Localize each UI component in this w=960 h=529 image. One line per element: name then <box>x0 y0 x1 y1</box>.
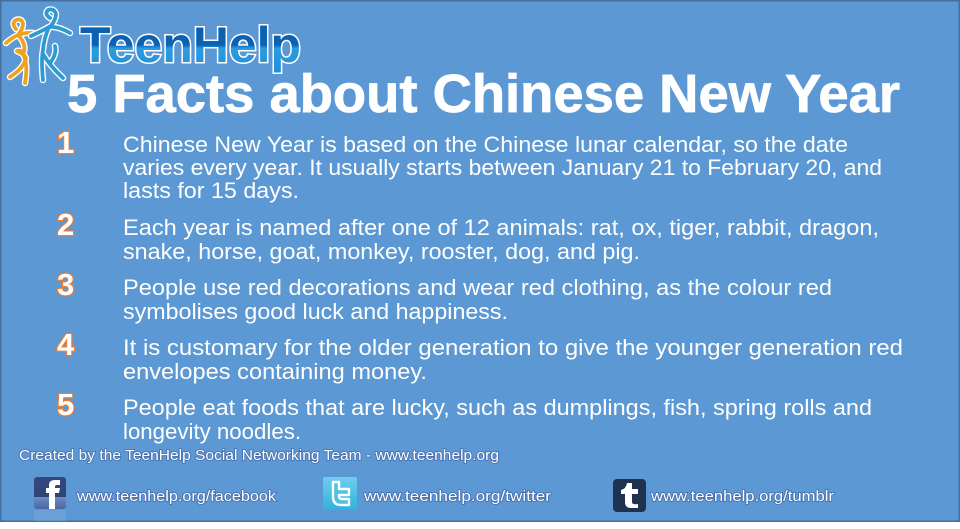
icon: facebook <box>34 477 66 521</box>
twitter link <box>323 477 551 510</box>
fact 4 <box>57 327 903 384</box>
logo wordmark: TeenHelp <box>80 17 301 73</box>
number 3: 3 <box>57 267 74 302</box>
credit line: Created by the TeenHelp Social Networking Team - www.teenhelp.org <box>19 447 499 464</box>
fact 5 <box>57 387 872 444</box>
title: 5 Facts about Chinese New Year <box>67 64 900 124</box>
logo: TeenHelp <box>6 10 301 83</box>
number 1: 1 <box>57 125 74 160</box>
fact 5 text <box>123 395 872 444</box>
fact 4 text: It is customary for the older generation to give the younger generation red <box>123 335 903 360</box>
icon: blue figure <box>31 10 70 80</box>
icon: twitter <box>323 477 357 510</box>
fact 2 <box>57 207 879 264</box>
fact 3 text: People use red decorations and wear red clothing, as the colour red <box>123 275 832 300</box>
number 2: 2 <box>57 207 74 242</box>
fact 4 text <box>123 335 903 384</box>
icon: tumblr <box>613 479 646 512</box>
fact 1 text: Chinese New Year is based on the Chinese lunar calendar, so the date <box>123 132 848 157</box>
fact 2 text: snake, horse, goat, monkey, rooster, dog, and pig. <box>123 239 640 264</box>
fact 3 text <box>123 275 832 324</box>
fact 1 <box>57 125 882 203</box>
fact 1 text: varies every year. It usually starts between January 21 to February 20, and <box>123 155 882 180</box>
twitter url: www.teenhelp.org/twitter <box>363 488 551 505</box>
facebook link <box>34 477 277 521</box>
fact 1 text <box>123 132 882 203</box>
number 5: 5 <box>57 387 74 422</box>
number 4: 4 <box>57 327 75 362</box>
fact 2 text: Each year is named after one of 12 animals: rat, ox, tiger, rabbit, dragon, <box>123 215 879 240</box>
tumblr link <box>613 479 834 512</box>
fact 3 <box>57 267 832 324</box>
fact 4 text: envelopes containing money. <box>123 359 427 384</box>
tumblr url: www.teenhelp.org/tumblr <box>650 488 834 505</box>
fact 3 text: symbolises good luck and happiness. <box>123 299 508 324</box>
fact 1 text: lasts for 15 days. <box>123 178 299 203</box>
icon: orange figure <box>6 20 33 83</box>
facebook url: www.teenhelp.org/facebook <box>76 488 277 505</box>
fact 5 text: longevity noodles. <box>123 419 301 444</box>
fact 5 text: People eat foods that are lucky, such as dumplings, fish, spring rolls and <box>123 395 872 420</box>
fact 2 text <box>123 215 879 264</box>
